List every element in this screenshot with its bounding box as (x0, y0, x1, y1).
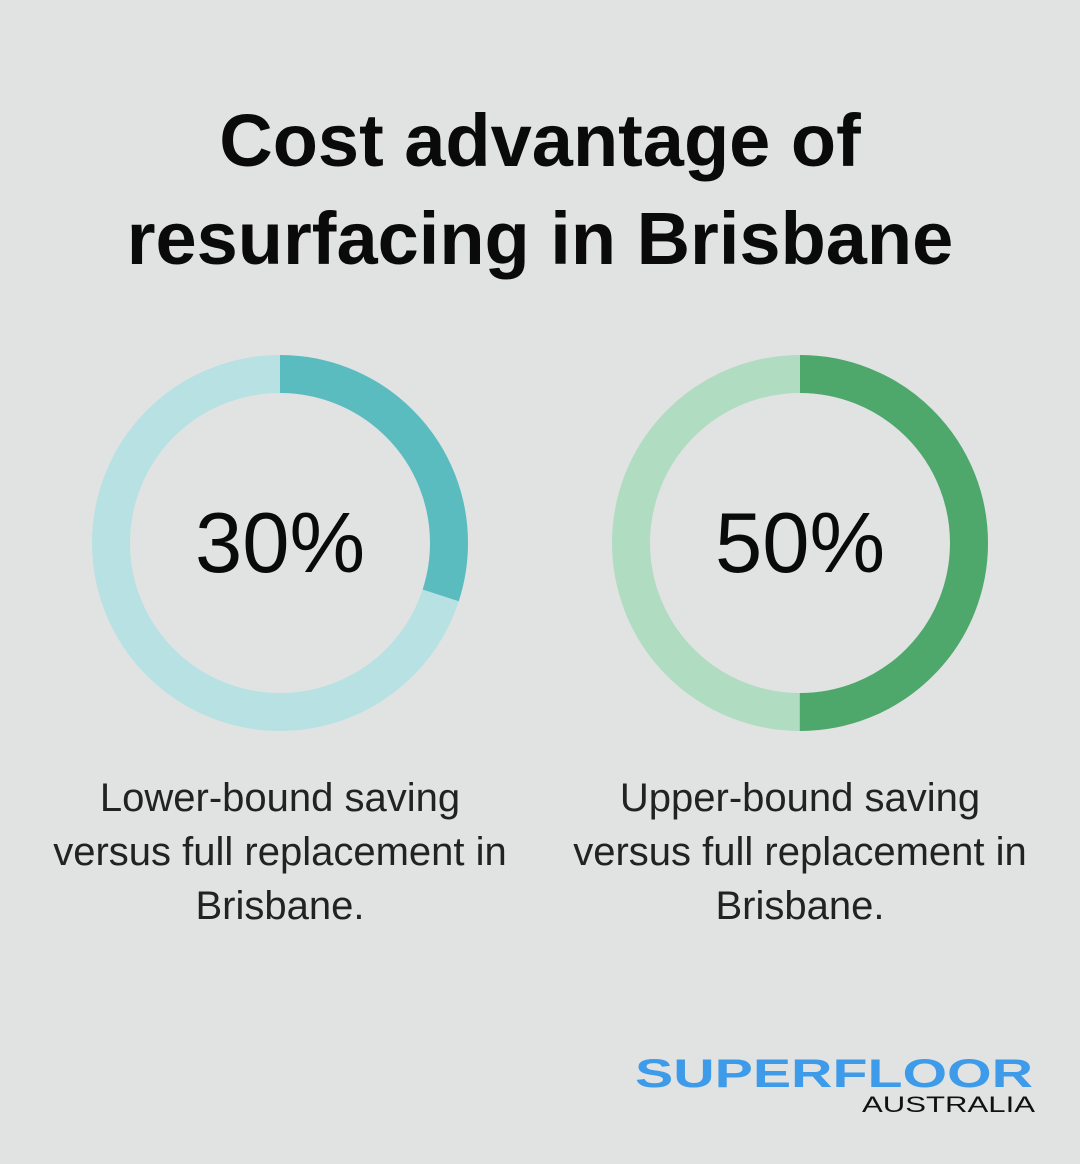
caption: lower bound: versus full replacement in (53, 830, 507, 874)
donut chart: 50% (612, 355, 988, 731)
title: resurfacing in Brisbane (127, 197, 953, 280)
donut chart: 50%: 50% (715, 496, 885, 591)
caption: lower bound (53, 776, 507, 928)
caption: upper bound (573, 776, 1027, 928)
caption: upper bound: versus full replacement in (573, 830, 1027, 874)
caption: lower bound: Brisbane. (196, 884, 364, 928)
logo: SUPERFLOOR (635, 1052, 1033, 1096)
caption: upper bound: Brisbane. (716, 884, 884, 928)
logo: AUSTRALIA (862, 1092, 1035, 1117)
title (127, 99, 953, 280)
caption: lower bound: Lower-bound saving (100, 776, 460, 820)
title: Cost advantage of (219, 99, 861, 182)
logo (635, 1052, 1035, 1117)
caption: upper bound: Upper-bound saving (620, 776, 980, 820)
donut chart: 30%: 30% (195, 496, 365, 591)
donut chart: 30% (92, 355, 468, 731)
